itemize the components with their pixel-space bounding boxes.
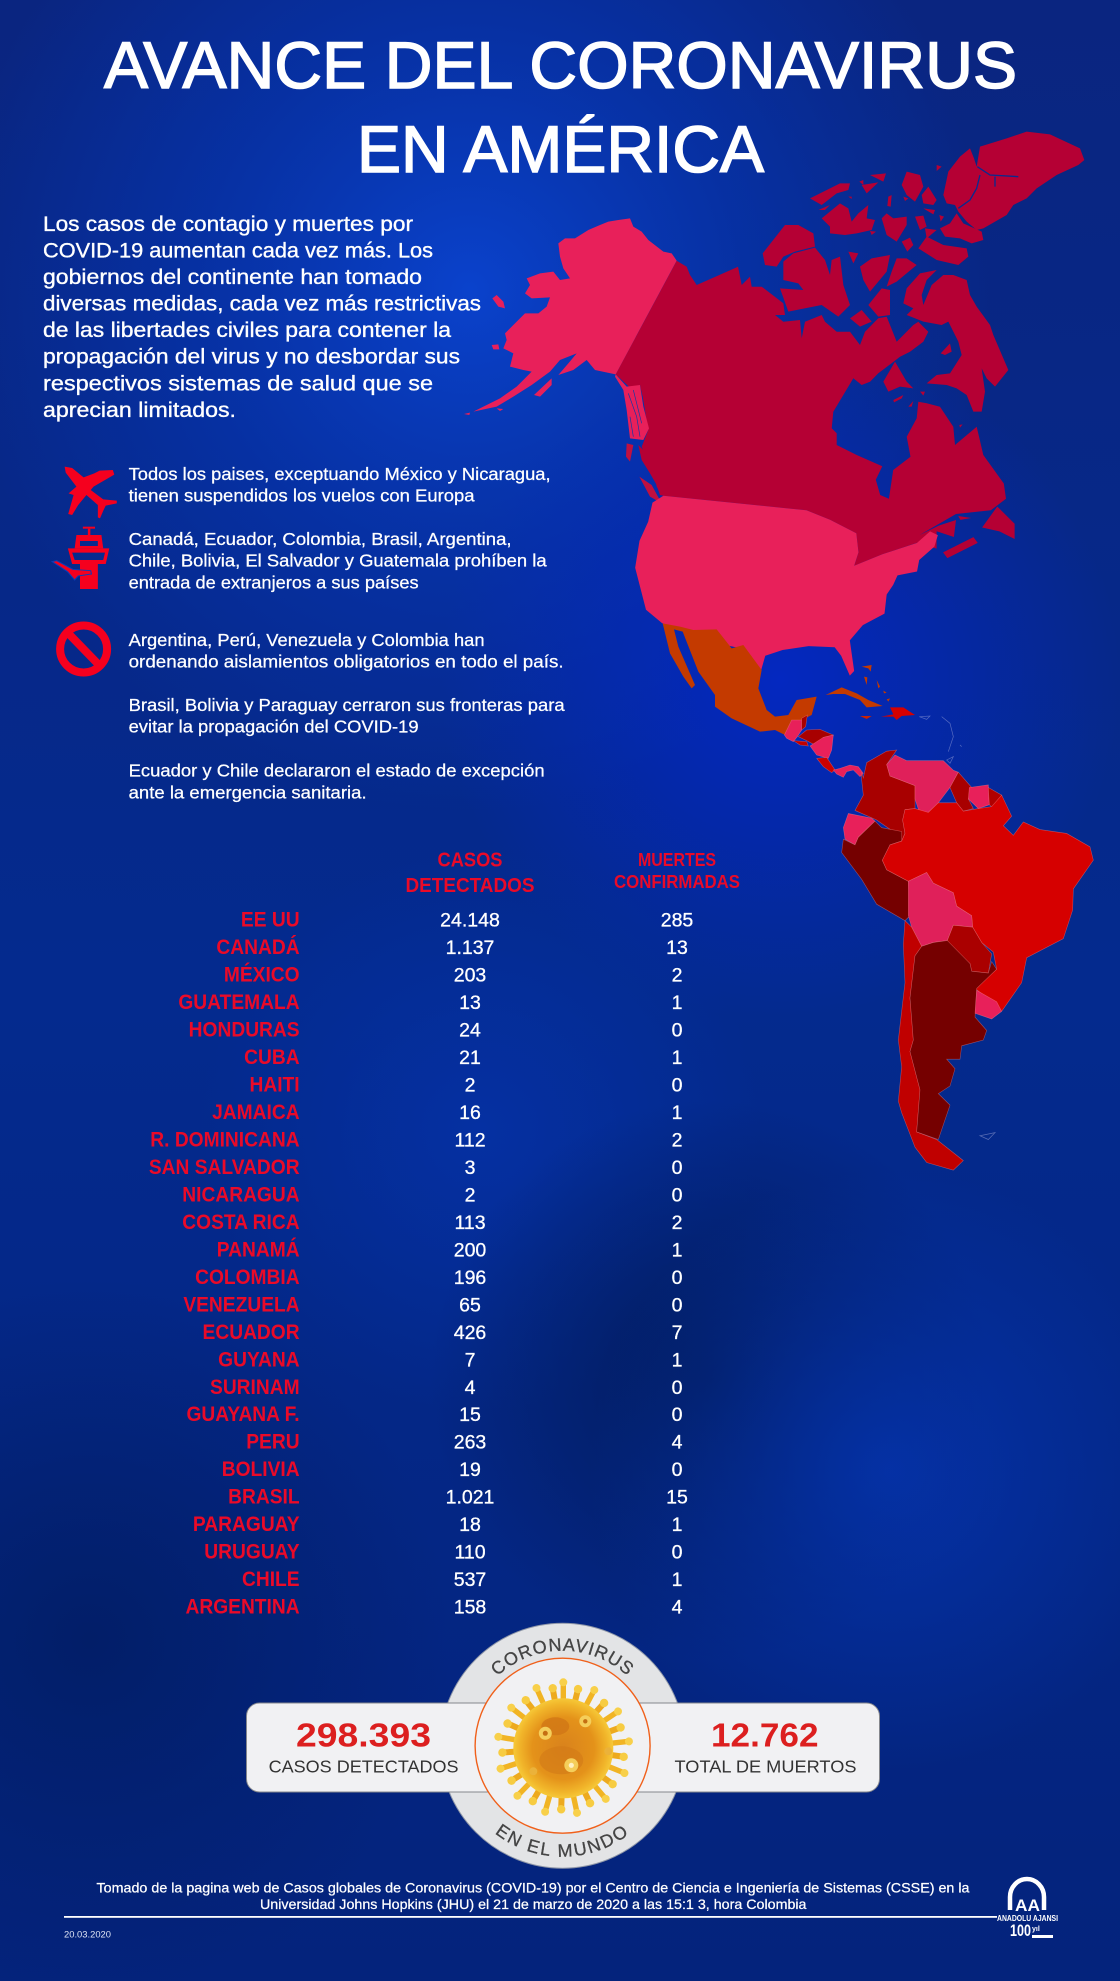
logo: Anadolu Ajansi 100: 100: [1010, 1921, 1031, 1940]
confirmed deaths column: 0: [672, 1184, 683, 1206]
confirmed deaths column: 0: [672, 1074, 683, 1096]
country names: CUBA: [244, 1046, 300, 1069]
Alaska islands: [464, 295, 552, 415]
Bahamas: [862, 665, 890, 702]
confirmed deaths column: 1: [672, 1349, 682, 1371]
confirmed deaths column: 0: [672, 1157, 683, 1179]
Banks Island: [763, 225, 815, 267]
measure text: isolation: ordenando aislamientos obligatorios en todo el país.: [129, 652, 564, 672]
table header: deaths: MUERTES: [638, 850, 716, 870]
Guyana: [950, 772, 973, 811]
map of the Americas: [464, 132, 1093, 1170]
detected cases column: 2: [465, 1184, 475, 1206]
Bolivia: [908, 872, 973, 946]
ring label: coronavirus: CORONAVIRUS: [492, 1638, 634, 1674]
intro paragraph: gobiernos del continente han tomado: [43, 266, 422, 289]
source note: [96, 1880, 970, 1912]
country names: URUGUAY: [204, 1541, 300, 1564]
country names: SAN SALVADOR: [149, 1156, 300, 1179]
Alaska panhandle: [615, 374, 649, 440]
logo: Anadolu Ajansi 100: ANADOLU AJANSI: [997, 1913, 1058, 1923]
Suriname: [968, 785, 989, 809]
detected cases column: 16: [459, 1102, 481, 1124]
measure text: foreigners: entrada de extranjeros a sus países: [129, 572, 419, 592]
Argentina: [910, 941, 997, 1140]
measure text: isolation: [129, 630, 564, 672]
measure text: flights: [129, 464, 551, 506]
measure text: borders: Brasil, Bolivia y Paraguay cerraron sus fronteras para: [129, 695, 565, 715]
Belize: [802, 715, 807, 730]
confirmed deaths column: 4: [672, 1597, 683, 1619]
detected cases column: 537: [454, 1569, 486, 1591]
detected cases column: 18: [459, 1514, 481, 1536]
intro paragraph: propagación del virus y no desbordar sus: [43, 346, 460, 369]
detected cases column: 426: [454, 1322, 486, 1344]
intro paragraph: de las libertades civiles para contener la: [43, 319, 451, 342]
country names: SURINAM: [210, 1376, 300, 1399]
table header: deaths: [614, 850, 740, 892]
measure text: state of exception: [129, 761, 545, 802]
country names: COSTA RICA: [182, 1211, 300, 1234]
detected cases column: 24: [459, 1020, 481, 1042]
Baffin Island: [903, 270, 1008, 412]
intro paragraph: diversas medidas, cada vez más restrictivas: [43, 293, 481, 316]
icon: airplane: [65, 467, 117, 518]
detected cases column: 65: [459, 1294, 481, 1316]
confirmed deaths column: 1: [672, 1569, 682, 1591]
Cuba: [826, 687, 883, 707]
detected cases column: 24.148: [440, 910, 500, 932]
country names: BRASIL: [228, 1486, 300, 1509]
Colombia: [855, 750, 915, 841]
country names: CHILE: [242, 1568, 300, 1591]
detected cases column: 19: [459, 1459, 481, 1481]
confirmed deaths column: 0: [672, 1267, 683, 1289]
measure text: isolation: Argentina, Perú, Venezuela y Colombia han: [129, 630, 485, 650]
detected cases column: 1.137: [446, 937, 494, 959]
measures list: [52, 464, 565, 802]
country names: [149, 909, 300, 1619]
title: EN AMÉRICA: [357, 112, 764, 186]
badge outer ring: [440, 1623, 685, 1868]
ring label: en el mundo: EN EL MUNDO: [496, 1824, 626, 1857]
stat: total deaths: TOTAL DE MUERTOS: [674, 1757, 856, 1777]
table header: deaths: CONFIRMADAS: [614, 872, 740, 892]
smaller Arctic islands: [810, 165, 983, 428]
country names: HAITI: [249, 1074, 300, 1097]
detected cases column: 2: [465, 1074, 475, 1096]
United States: [635, 496, 938, 676]
measure text: state of exception: ante la emergencia sanitaria.: [129, 782, 367, 802]
icon: prohibition sign: [60, 626, 107, 672]
measure text: foreigners: Chile, Bolivia, El Salvador y Guatemala prohíben la: [129, 551, 547, 571]
Guatemala: [784, 720, 802, 742]
source note: Universidad Johns Hopkins (JHU) el 21 de marzo de 2020 a las 15:1 3, hora Colombia: [260, 1896, 807, 1912]
measure text: borders: evitar la propagación del COVID-19: [129, 717, 419, 737]
Victoria Island: [780, 248, 850, 317]
intro paragraph: [43, 213, 481, 422]
detected cases column: 7: [465, 1349, 475, 1371]
confirmed deaths column: 4: [672, 1432, 683, 1454]
detected cases column: 13: [459, 992, 481, 1014]
detected cases column: 263: [454, 1432, 486, 1454]
country names: EE UU: [241, 909, 300, 932]
detected cases column: 200: [454, 1239, 486, 1261]
measure text: borders: [129, 695, 565, 737]
stats card: [246, 1703, 880, 1792]
logo: Anadolu Ajansi 100: [997, 1879, 1058, 1940]
Ellesmere Island: [943, 132, 1084, 230]
Uruguay: [975, 990, 1002, 1019]
detected cases column: 158: [454, 1597, 486, 1619]
Chile: [898, 921, 963, 1170]
table header: cases: DETECTADOS: [406, 875, 534, 897]
confirmed deaths column: 1: [672, 992, 682, 1014]
confirmed deaths column: 15: [666, 1487, 688, 1509]
confirmed deaths column: 0: [672, 1377, 683, 1399]
detected cases column: 203: [454, 965, 486, 987]
detected cases column: [440, 910, 500, 1619]
stat: total deaths: [674, 1717, 856, 1777]
stat: total deaths: 12.762: [711, 1717, 818, 1754]
Peru: [842, 821, 910, 921]
Panama: [833, 765, 863, 777]
detected cases column: 1.021: [446, 1487, 494, 1509]
source note: Tomado de la pagina web de Casos globales de Coronavirus (COVID-19) por el Centro de Ciencia e Ingeniería de Sistemas (CSSE) en la: [96, 1880, 970, 1896]
Mexico: [663, 623, 817, 735]
detected cases column: 21: [459, 1047, 481, 1069]
confirmed deaths column: 1: [672, 1047, 682, 1069]
country names: ECUADOR: [203, 1321, 300, 1344]
confirmed deaths column: 0: [672, 1404, 683, 1426]
stat: detected cases: [269, 1717, 459, 1777]
map: South America: [842, 750, 1093, 1170]
Ecuador: [843, 814, 875, 845]
intro paragraph: aprecian limitados.: [43, 399, 236, 422]
country names: GUAYANA F.: [187, 1403, 300, 1426]
country names: MÉXICO: [224, 963, 300, 987]
stat: detected cases: CASOS DETECTADOS: [269, 1757, 459, 1777]
map: Alaska and Pacific coast: [464, 218, 677, 503]
detected cases column: 196: [454, 1267, 486, 1289]
Venezuela: [887, 755, 958, 814]
map: Canadian Arctic islands: [763, 132, 1084, 428]
title: [104, 28, 1017, 186]
badge inner circle: [475, 1658, 650, 1833]
Alaska: [473, 218, 677, 412]
country names: GUATEMALA: [178, 991, 300, 1014]
intro paragraph: respectivos sistemas de salud que se: [43, 372, 433, 395]
confirmed deaths column: [661, 910, 693, 1619]
map: United States and eastern Canada: [635, 496, 1015, 676]
confirmed deaths column: 2: [672, 1212, 682, 1234]
Jamaica: [860, 716, 872, 719]
confirmed deaths column: 0: [672, 1294, 683, 1316]
detected cases column: 4: [465, 1377, 476, 1399]
title: AVANCE DEL CORONAVIRUS: [104, 28, 1017, 102]
country names: JAMAICA: [212, 1101, 300, 1124]
intro paragraph: COVID-19 aumentan cada vez más. Los: [43, 240, 433, 263]
country names: R. DOMINICANA: [150, 1129, 300, 1152]
Brazil: [882, 795, 1093, 1011]
country names: PANAMÁ: [217, 1238, 300, 1262]
country names: HONDURAS: [189, 1019, 300, 1042]
Falkland Islands: [980, 1133, 995, 1140]
date: 20.03.2020: [64, 1930, 111, 1941]
Hispaniola: [881, 707, 915, 720]
measure text: foreigners: [129, 529, 547, 592]
country names: CANADÁ: [216, 935, 300, 959]
Nicaragua: [810, 735, 833, 758]
confirmed deaths column: 285: [661, 910, 693, 932]
measure text: flights: Todos los paises, exceptuando México y Nicaragua,: [129, 464, 551, 484]
detected cases column: 15: [459, 1404, 481, 1426]
intro paragraph: Los casos de contagio y muertes por: [43, 213, 413, 236]
detected cases column: 110: [454, 1542, 486, 1564]
confirmed deaths column: 2: [672, 965, 682, 987]
logo: Anadolu Ajansi 100: yıl: [1032, 1926, 1040, 1933]
measure text: foreigners: Canadá, Ecuador, Colombia, Brasil, Argentina,: [129, 529, 512, 549]
confirmed deaths column: 2: [672, 1129, 682, 1151]
stat: detected cases: 298.393: [296, 1717, 431, 1754]
Canada mainland: [616, 261, 1006, 566]
country names: ARGENTINA: [185, 1596, 300, 1619]
confirmed deaths column: 1: [672, 1102, 682, 1124]
country names: COLOMBIA: [195, 1266, 300, 1289]
detected cases column: 3: [465, 1157, 475, 1179]
country names: PARAGUAY: [193, 1513, 300, 1536]
country names: VENEZUELA: [183, 1294, 300, 1317]
British Columbia islands: [626, 443, 662, 503]
country names: BOLIVIA: [222, 1458, 300, 1481]
confirmed deaths column: 0: [672, 1020, 683, 1042]
country names: PERU: [246, 1431, 300, 1454]
confirmed deaths column: 7: [672, 1322, 682, 1344]
French Guiana: [988, 787, 1002, 809]
table header: cases: CASOS: [438, 850, 502, 872]
confirmed deaths column: 0: [672, 1542, 683, 1564]
confirmed deaths column: 1: [672, 1239, 682, 1261]
table of cases by country: [149, 850, 740, 1619]
measure text: flights: tienen suspendidos los vuelos con Europa: [129, 486, 475, 506]
table header: cases: [406, 850, 534, 897]
Costa Rica: [817, 757, 835, 773]
logo: Anadolu Ajansi 100: AA: [1015, 1896, 1040, 1915]
confirmed deaths column: 1: [672, 1514, 682, 1536]
El Salvador: [793, 741, 808, 746]
measure text: state of exception: Ecuador y Chile declararon el estado de excepción: [129, 761, 545, 781]
Honduras: [798, 729, 833, 745]
detected cases column: 112: [454, 1129, 486, 1151]
confirmed deaths column: 0: [672, 1459, 683, 1481]
confirmed deaths column: 13: [666, 937, 688, 959]
Lesser Antilles: [919, 716, 962, 763]
world totals badge: [246, 1622, 880, 1869]
country names: GUYANA: [218, 1349, 300, 1372]
map: Mexico, Central America and Caribbean: [663, 623, 962, 777]
Newfoundland and Nova Scotia: [943, 506, 1015, 558]
country names: NICARAGUA: [182, 1184, 300, 1207]
icon: control tower: [52, 527, 109, 589]
detected cases column: 113: [454, 1212, 486, 1234]
icon: virus: [494, 1678, 633, 1818]
Paraguay: [947, 925, 992, 973]
